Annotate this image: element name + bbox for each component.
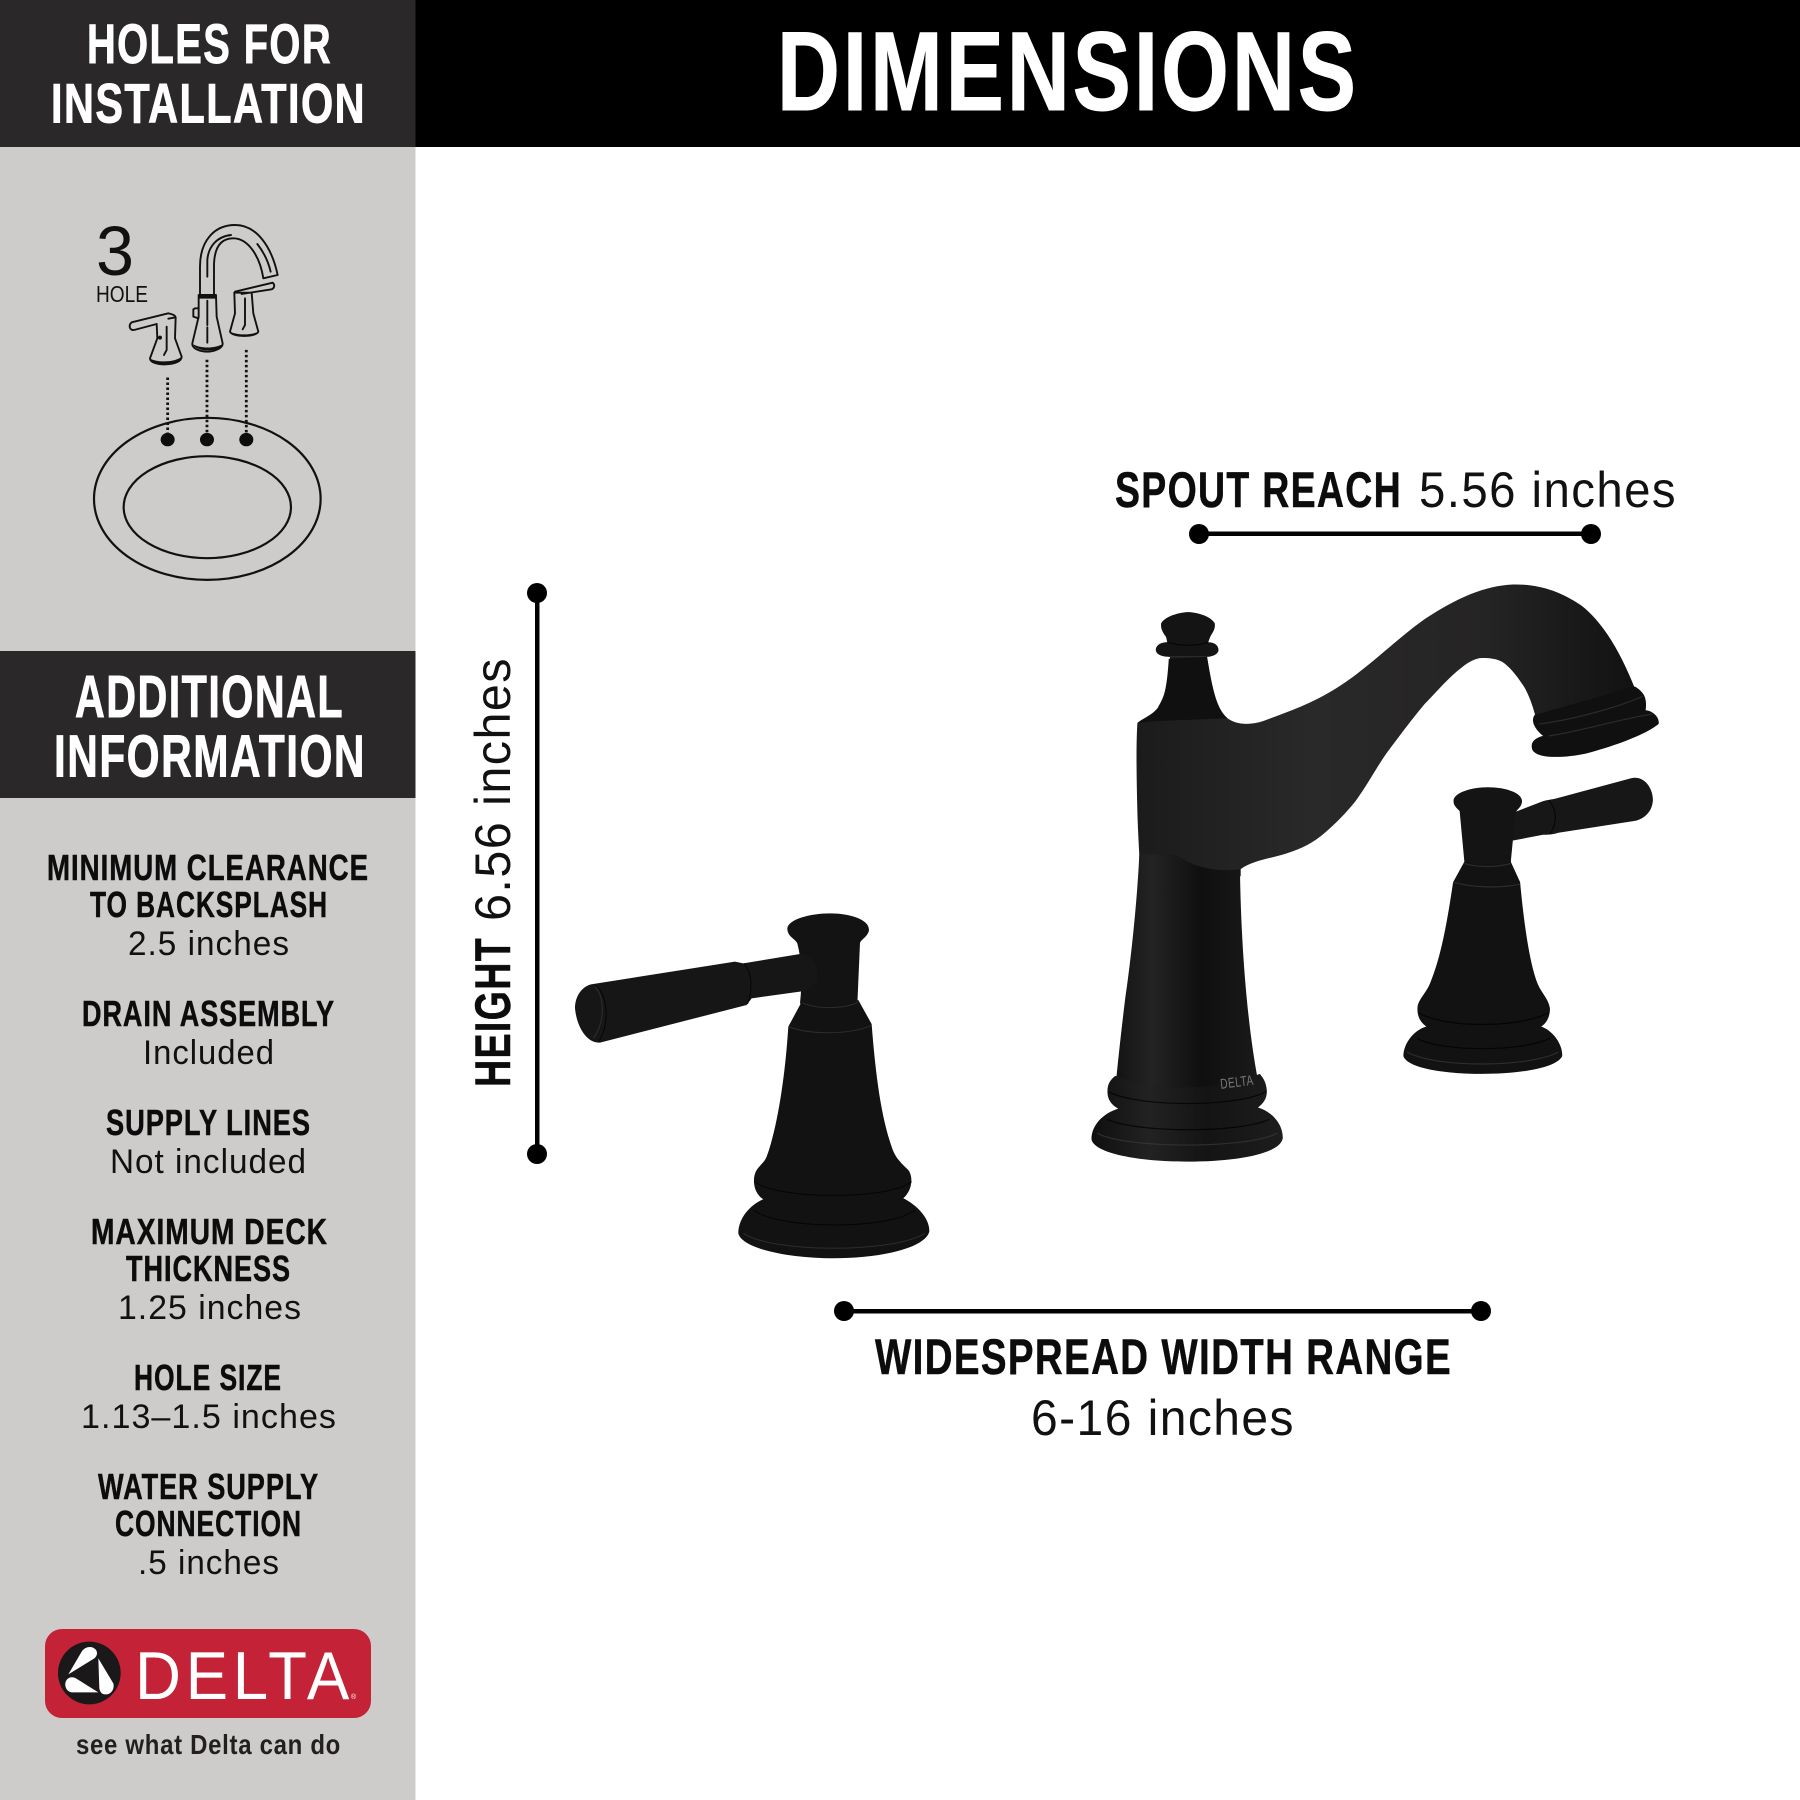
icon: delta triangle mark (58, 1642, 121, 1704)
text block: hole size: 1.13–1.5 inches (81, 1398, 337, 1436)
bell body (738, 1000, 929, 1258)
text block: water supply connection (98, 1466, 319, 1582)
cap (1454, 787, 1522, 867)
label: spout reach: 5.56 inches (1419, 462, 1677, 518)
icon: small faucet line art (130, 225, 278, 365)
text block: minimum clearance: TO BACKSPLASH (90, 884, 328, 925)
dimension: spout reach (1115, 462, 1677, 544)
text block: water supply connection: WATER SUPPLY (98, 1466, 319, 1507)
label: height: HEIGHT (465, 937, 521, 1087)
number: 3 hole (96, 212, 148, 307)
base rings (1091, 1074, 1283, 1162)
stem shading (1115, 854, 1260, 1090)
text block: drain assembly (82, 993, 335, 1072)
aerator (1532, 686, 1659, 757)
text block: water supply connection: .5 inches (138, 1544, 280, 1582)
text block: supply lines: SUPPLY LINES (106, 1102, 311, 1143)
icon: three hole sink diagram (94, 212, 321, 580)
text block: maximum deck thickness (91, 1211, 328, 1327)
illustration: left handle (575, 913, 929, 1258)
label: height: 6.56 inches (465, 657, 521, 921)
panel: holes for installation header (0, 0, 416, 147)
heading: additional information: ADDITIONAL (75, 664, 344, 730)
finial (1156, 612, 1219, 657)
panel: additional information header (0, 651, 416, 798)
text block: drain assembly: Included (143, 1034, 275, 1072)
text block: maximum deck thickness: 1.25 inches (118, 1289, 302, 1327)
icon: sink line art (94, 350, 321, 580)
bell body (1403, 861, 1562, 1074)
number: 3 hole: 3 (96, 212, 134, 290)
logo: delta: ® (351, 1693, 357, 1701)
label: widespread width range: WIDESPREAD WIDTH RANGE (875, 1329, 1452, 1385)
dimension: widespread width range (834, 1301, 1491, 1446)
text block: supply lines: Not included (110, 1143, 307, 1181)
heading: holes for installation: INSTALLATION (51, 72, 366, 134)
value: 6-16 inches: 6-16 inches (1031, 1390, 1295, 1446)
text block: maximum deck thickness: MAXIMUM DECK (91, 1211, 328, 1252)
heading: holes for installation: HOLES FOR (87, 12, 332, 75)
lever (1512, 778, 1653, 841)
panel: sidebar background (0, 147, 416, 1800)
logo: delta: DELTA (135, 1638, 354, 1714)
lever (575, 954, 818, 1043)
spout body (1137, 584, 1635, 876)
dimension: height (465, 583, 547, 1164)
arrow: height line (527, 583, 547, 1164)
text block: minimum clearance: MINIMUM CLEARANCE (47, 847, 369, 888)
label: spout reach: SPOUT REACH (1115, 462, 1402, 518)
cap (787, 913, 869, 1010)
text block: minimum clearance (47, 847, 369, 963)
panel: dimensions header (415, 0, 1800, 147)
text block: minimum clearance: 2.5 inches (128, 925, 290, 963)
illustration: faucet spout (1091, 584, 1659, 1162)
number: 3 hole: HOLE (96, 281, 148, 307)
arrow: spout reach line (1189, 524, 1601, 544)
text block: hole size: HOLE SIZE (134, 1357, 282, 1398)
text block: supply lines (106, 1102, 311, 1181)
heading: additional information: INFORMATION (54, 724, 366, 790)
delta imprint: DELTA (1219, 1072, 1255, 1092)
text block: drain assembly: DRAIN ASSEMBLY (82, 993, 335, 1034)
logo: delta (45, 1629, 371, 1760)
text block: water supply connection: CONNECTION (115, 1503, 302, 1544)
title: dimensions: DIMENSIONS (777, 9, 1359, 134)
label: height (465, 657, 521, 1087)
text block: maximum deck thickness: THICKNESS (126, 1248, 291, 1289)
arrow: width line (834, 1301, 1491, 1321)
text block: hole size (81, 1357, 337, 1436)
tagline: see what Delta can do (76, 1729, 341, 1760)
illustration: right handle (1403, 778, 1653, 1074)
